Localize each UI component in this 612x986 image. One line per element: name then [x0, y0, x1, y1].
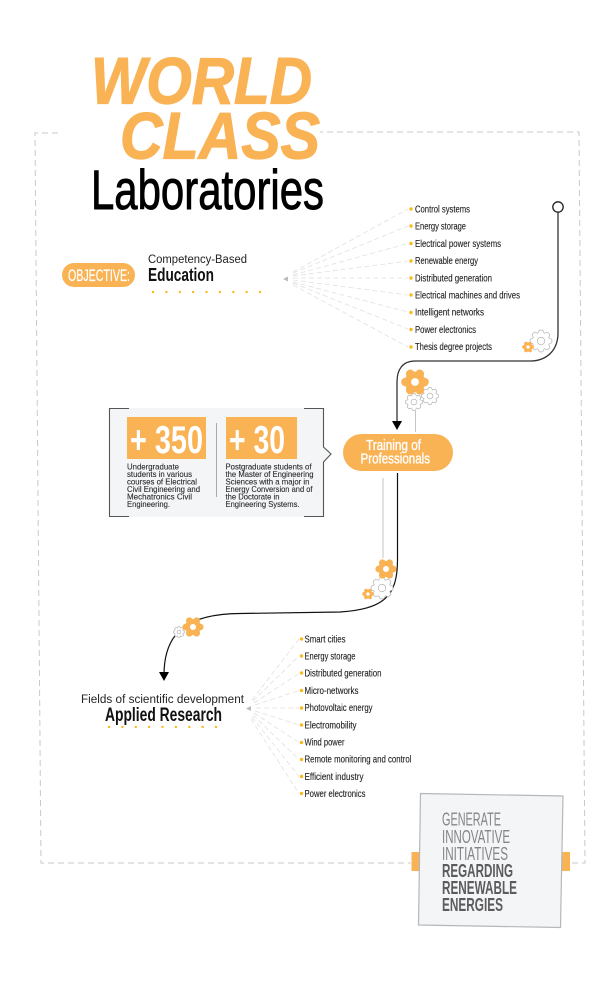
gears: below training pill — [362, 559, 397, 599]
orange tabs behind card — [412, 852, 570, 871]
dotted underline: research — [108, 726, 217, 728]
title: Laboratories — [91, 158, 324, 221]
panel: student numbers — [109, 408, 331, 517]
list: research fields: Distributed generation — [304, 668, 382, 680]
title — [91, 44, 324, 221]
list: competencies: Thesis degree projects — [415, 341, 492, 353]
callout card: REGARDING — [442, 860, 513, 881]
stat: postgraduate: the Doctorate in — [226, 492, 280, 502]
list: competencies: Electrical power systems — [415, 238, 501, 250]
stat: postgraduate: Energy Conversion and of — [226, 485, 313, 494]
stat: undergraduate: students in various — [127, 470, 192, 479]
callout card: RENEWABLE — [442, 877, 517, 898]
list: research fields: Power electronics — [304, 788, 366, 800]
training pill: Training of — [366, 438, 422, 454]
objective pill: OBJECTIVE: — [68, 267, 130, 285]
list: competencies: Intelligent networks — [415, 307, 484, 319]
gears: above training pill — [401, 370, 438, 410]
research heading — [81, 694, 245, 726]
fan connector: research fields — [246, 639, 299, 794]
stat: postgraduate — [226, 417, 314, 509]
title: WORLD — [91, 44, 312, 118]
stat: postgraduate: Postgraduate students of — [226, 462, 312, 472]
stat: undergraduate: Engineering. — [127, 500, 170, 509]
list: research fields: Smart cities — [304, 633, 346, 645]
title: CLASS — [120, 98, 320, 172]
list: research fields: Photovoltaic energy — [304, 702, 373, 714]
stat: undergraduate: Mechatronics Civil — [127, 492, 192, 502]
list: research fields: Efficient industry — [304, 771, 364, 783]
fan connector: competencies — [283, 209, 408, 347]
stat: postgraduate: + 30 — [229, 419, 285, 462]
callout card: INITIATIVES — [442, 843, 508, 864]
training pill: Professionals — [360, 452, 430, 468]
training pill — [343, 434, 453, 471]
callout card — [418, 794, 563, 928]
callout card: INNOVATIVE — [442, 826, 510, 847]
list: research fields: Electromobility — [304, 719, 357, 731]
stat: undergraduate — [127, 417, 206, 509]
research heading: Fields of scientific development — [81, 694, 245, 706]
stat: postgraduate: Sciences with a major in — [226, 478, 310, 486]
gears: above applied research — [174, 617, 204, 637]
list: competencies: Energy storage — [415, 221, 466, 233]
callout card: GENERATE — [442, 808, 501, 830]
gears: upper right — [522, 330, 552, 352]
gray connector lines — [383, 411, 416, 558]
list: research fields: Energy storage — [304, 650, 356, 662]
list: competencies: Control systems — [415, 204, 470, 216]
list: research fields: Micro-networks — [304, 685, 358, 697]
list: competencies: Distributed generation — [415, 272, 492, 284]
research heading: Applied Research — [105, 705, 222, 726]
flow line: start to training — [392, 202, 563, 430]
stat: postgraduate: Engineering Systems. — [226, 500, 300, 509]
panel background — [109, 408, 331, 517]
list: research fields: Remote monitoring and control — [304, 754, 412, 766]
stat: undergraduate: Undergraduate — [127, 462, 180, 472]
stat: undergraduate: + 350 — [130, 419, 203, 462]
objective pill — [62, 263, 135, 287]
stat: undergraduate: courses of Electrical — [127, 478, 197, 486]
list: research fields — [300, 633, 412, 800]
callout card: ENERGIES — [442, 894, 503, 915]
dashed frame — [35, 132, 585, 863]
list: competencies — [409, 204, 520, 353]
flow line: training to research — [159, 473, 398, 681]
objective heading: Education — [148, 265, 214, 285]
list: research fields: Wind power — [304, 736, 345, 748]
stat: undergraduate: Civil Engineering and — [127, 485, 200, 494]
panel brackets — [110, 408, 331, 516]
stat: postgraduate: the Master of Engineering — [226, 470, 314, 479]
list: competencies: Electrical machines and drives — [415, 290, 520, 302]
objective heading — [148, 254, 247, 285]
list: competencies: Power electronics — [415, 324, 476, 336]
list: competencies: Renewable energy — [415, 255, 479, 267]
dotted underline: education — [152, 291, 261, 293]
objective heading: Competency-Based — [148, 254, 247, 266]
